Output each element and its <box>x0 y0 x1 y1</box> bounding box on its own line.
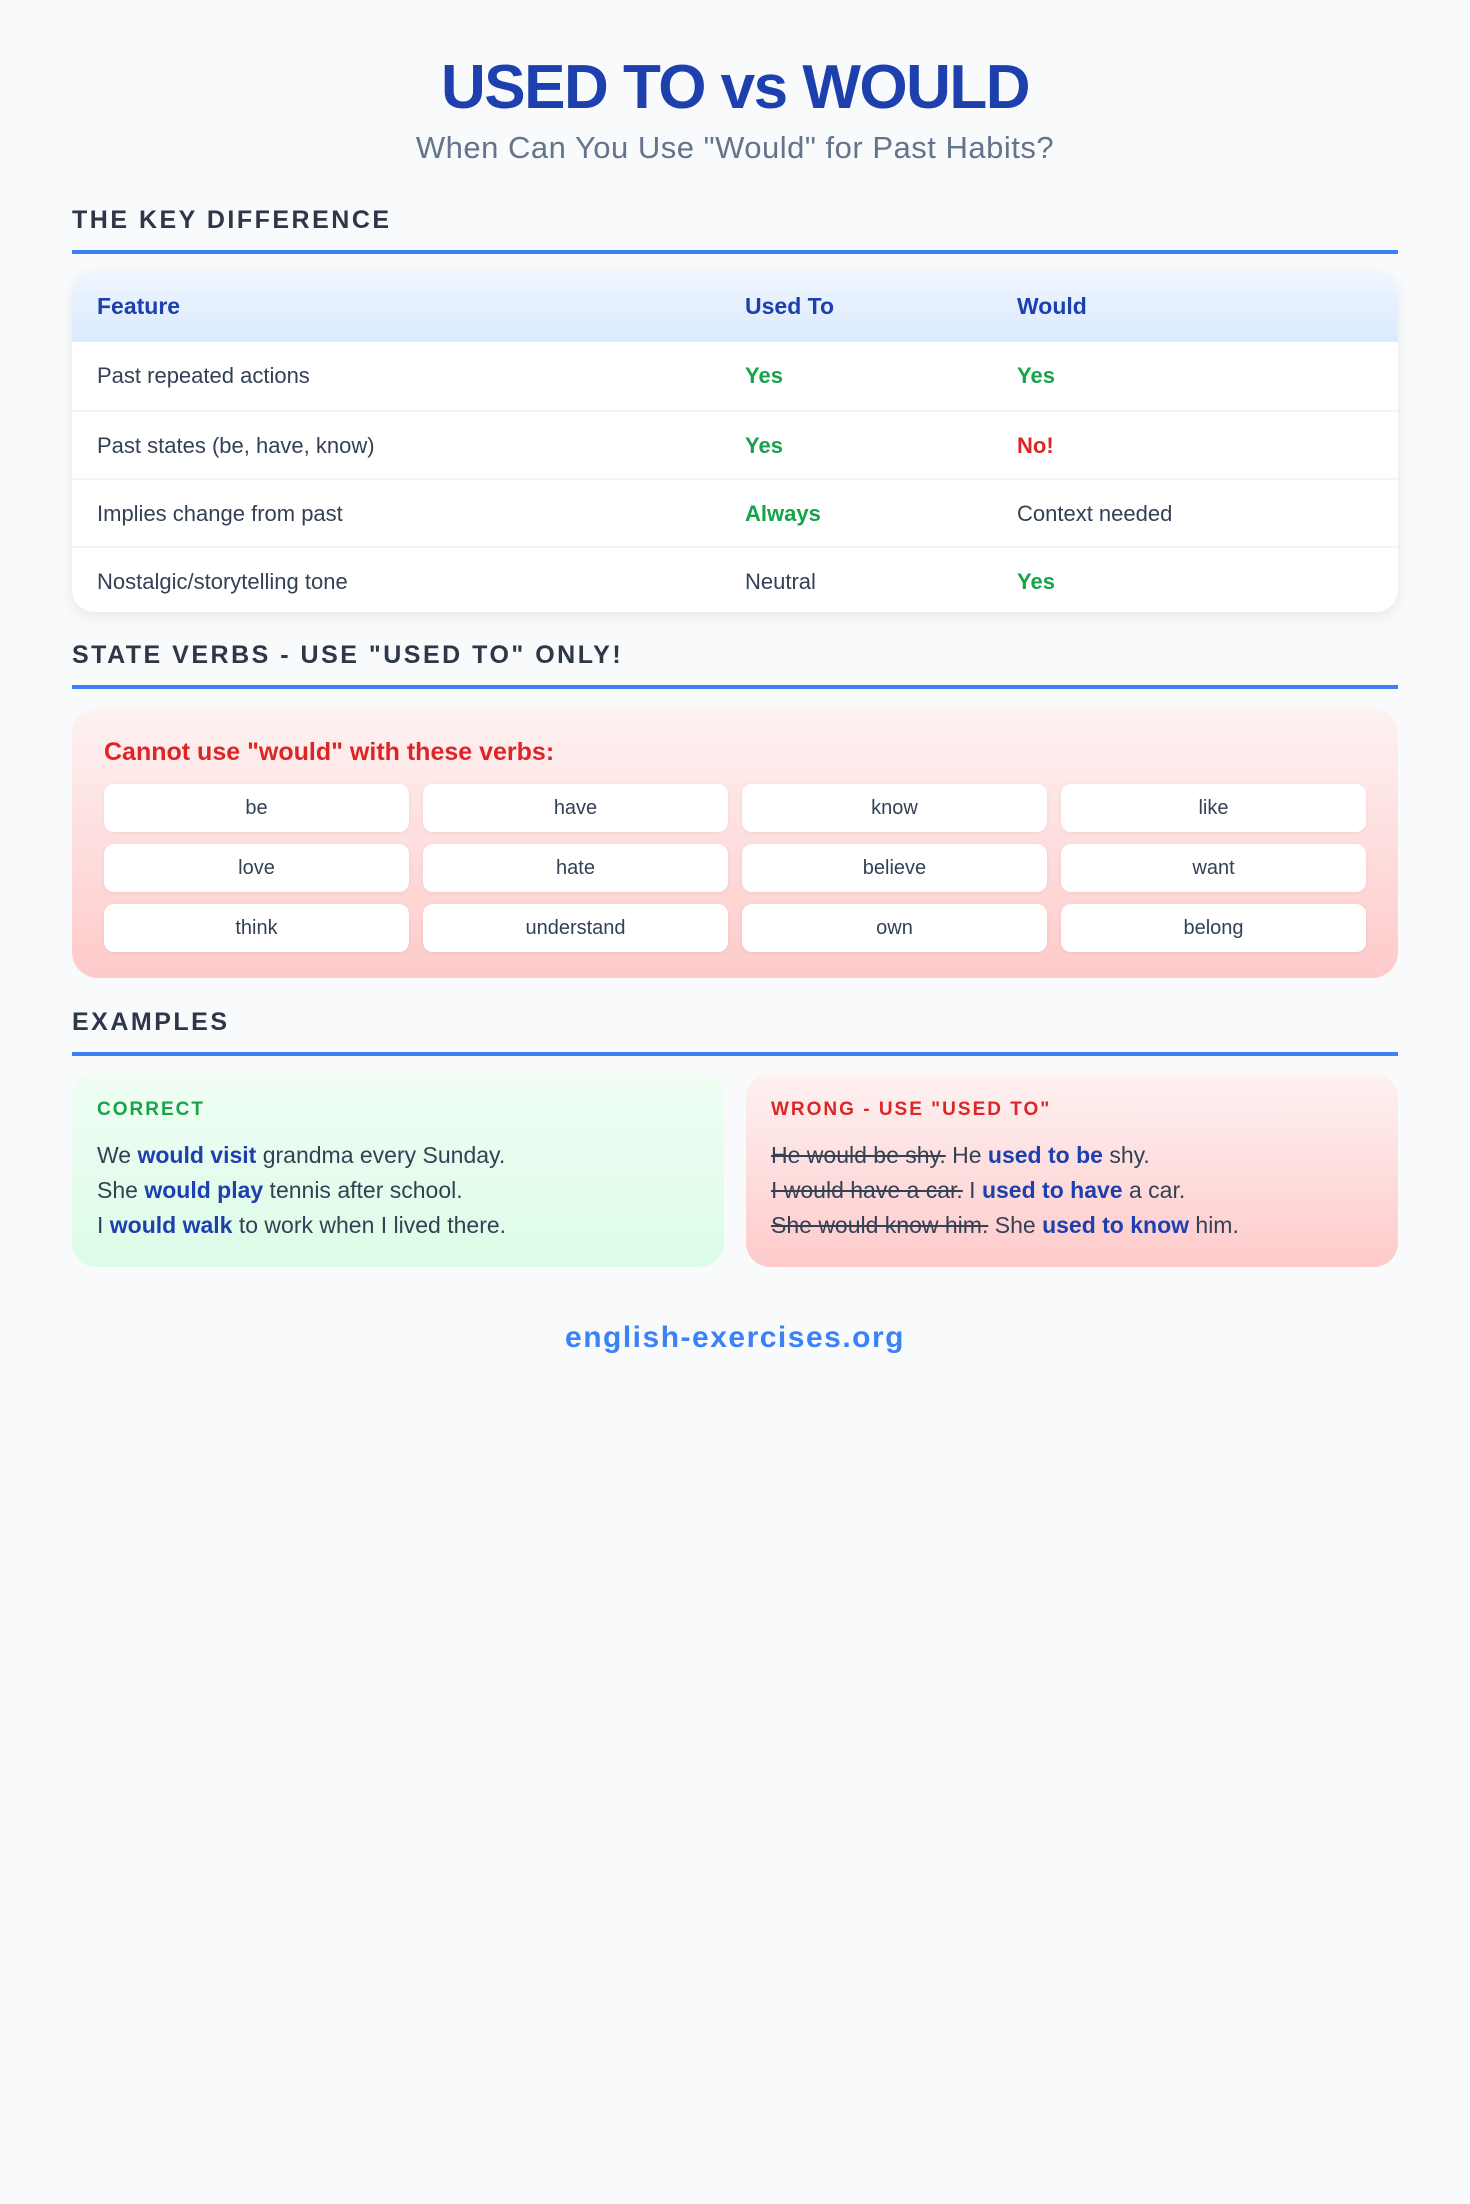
verb chips: know <box>871 797 918 819</box>
wrong sentences: She would know him. She used to know him. <box>771 1212 1239 1238</box>
label: wrong: WRONG - USE "USED TO" <box>771 1099 1051 1120</box>
heading: the key difference: THE KEY DIFFERENCE <box>72 206 392 234</box>
row: past repeated actions: Yes <box>1017 363 1055 388</box>
table header <box>72 272 1398 342</box>
verb chips: want <box>1192 857 1235 879</box>
heading: state verbs: STATE VERBS - USE "USED TO" ONLY! <box>72 641 623 669</box>
correct sentences <box>97 1142 506 1238</box>
verb chips: understand <box>525 917 626 939</box>
row: implies change: Context needed <box>1017 501 1172 526</box>
row: tone: Yes <box>1017 569 1055 594</box>
table header: Would <box>1017 293 1087 319</box>
wrong sentences <box>771 1142 1239 1238</box>
row: past states <box>72 410 1398 478</box>
heading: the key difference <box>72 206 1398 254</box>
panel: state verbs <box>72 708 1398 978</box>
row: past repeated actions <box>97 363 1055 388</box>
panel: correct examples <box>72 1073 724 1267</box>
correct sentences: We would visit grandma every Sunday. <box>97 1142 505 1168</box>
row: implies change: Always <box>745 501 821 526</box>
verb chips: have <box>554 797 597 819</box>
verb chips: be <box>245 797 268 819</box>
verb chips <box>104 784 1366 952</box>
verb chips: think <box>235 917 278 939</box>
label: correct: CORRECT <box>97 1099 205 1120</box>
verb chips: belong <box>1183 917 1244 939</box>
verb chips: love <box>238 857 275 879</box>
verb chips: like <box>1198 797 1228 819</box>
subtitle: When Can You Use "Would" for Past Habits? <box>416 130 1054 165</box>
correct sentences: I would walk to work when I lived there. <box>97 1212 506 1238</box>
row: tone <box>72 546 1398 614</box>
panel heading: Cannot use "would" with these verbs: <box>104 738 554 766</box>
panel: wrong examples <box>746 1073 1398 1267</box>
row: past repeated actions: Past repeated actions <box>97 363 310 388</box>
row: past states: No! <box>1017 433 1054 458</box>
heading: examples <box>72 1008 1398 1056</box>
row: past states: Past states (be, have, know) <box>97 433 375 458</box>
row: tone: Nostalgic/storytelling tone <box>97 569 348 594</box>
verb chips: believe <box>863 857 926 879</box>
heading: state verbs <box>72 641 1398 689</box>
title: USED TO vs WOULD <box>441 53 1029 122</box>
correct sentences: She would play tennis after school. <box>97 1177 463 1203</box>
verb chips: hate <box>556 857 595 879</box>
footer: english-exercises.org <box>565 1321 905 1354</box>
heading: examples: EXAMPLES <box>72 1008 230 1036</box>
table header: Feature <box>97 293 180 319</box>
wrong sentences: I would have a car. I used to have a car. <box>771 1177 1185 1203</box>
table header: Used To <box>745 293 834 319</box>
verb chips: own <box>876 917 913 939</box>
wrong sentences: He would be shy. He used to be shy. <box>771 1142 1150 1168</box>
comparison table <box>72 272 1398 612</box>
row: implies change: Implies change from past <box>97 501 343 526</box>
row: implies change <box>72 478 1398 546</box>
row: past states: Yes <box>745 433 783 458</box>
row: tone: Neutral <box>745 569 816 594</box>
row: past repeated actions: Yes <box>745 363 783 388</box>
